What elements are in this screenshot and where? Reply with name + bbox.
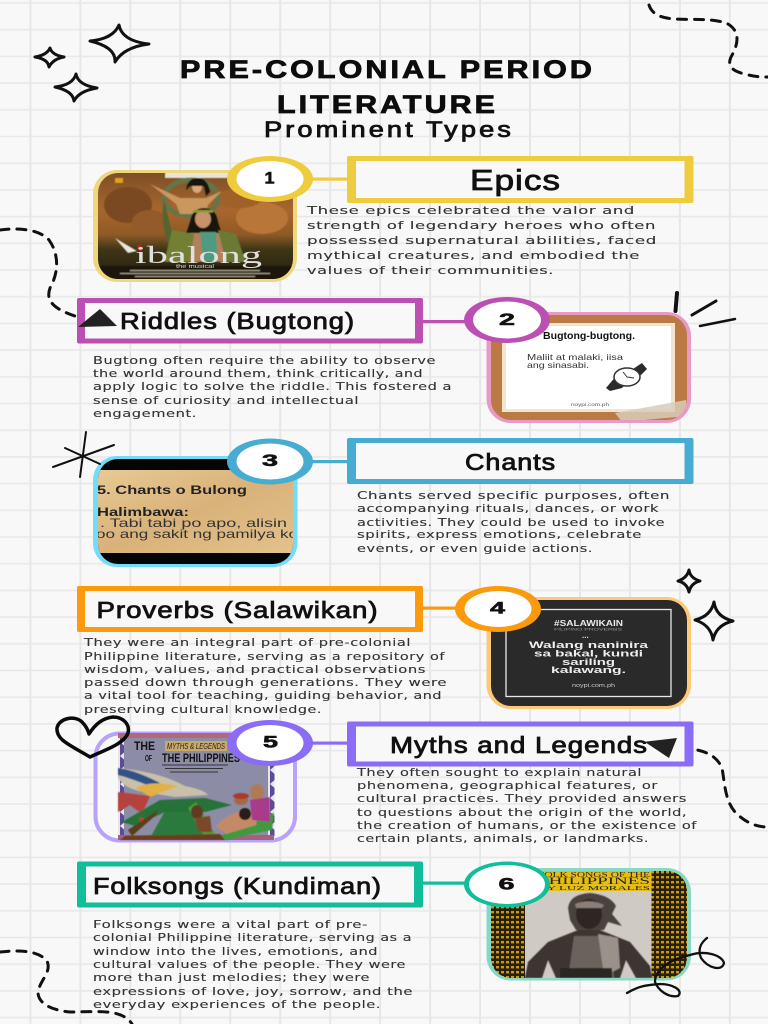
- title: PRE-COLONIAL PERIOD: [180, 56, 595, 84]
- connector 6: [422, 882, 466, 885]
- icon: heart outline: [57, 717, 128, 757]
- number badge 1: [227, 156, 313, 202]
- text: myths description: the creation of humans, or the existence of: [357, 820, 697, 832]
- icon: triangle pointer: [645, 738, 677, 758]
- icon: medium sparkle: [55, 74, 97, 101]
- text: myths description: [356, 767, 697, 845]
- text: epics description: mythical creatures, and embodied the: [307, 250, 640, 262]
- icon: large sparkle right: [695, 602, 733, 640]
- image: chants paper: oo ang sakit ng pamilya ko: [96, 527, 298, 541]
- text: chants description: events, or even guide actions.: [357, 543, 593, 555]
- text: myths description: certain plants, animals, or landmarks.: [357, 833, 649, 845]
- image: myths and legends poster: MYTHS & LEGENDS: [167, 742, 226, 751]
- dashed curve: top right: [649, 5, 768, 77]
- heading box: epics: [347, 156, 694, 203]
- image: ibalong poster: the musical: [176, 264, 214, 270]
- text: folksongs description: everyday experiences of the people.: [93, 999, 381, 1011]
- image: salawikain card: Walang naninira: [529, 640, 649, 651]
- image: bugtong card: noypi.com.ph: [571, 402, 610, 407]
- text: epics description: values of their communities.: [307, 265, 554, 277]
- title: LITERATURE: [277, 91, 498, 119]
- image: salawikain card: kalawang.: [551, 665, 626, 676]
- image: bugtong card: Bugtong-bugtong.: [543, 330, 635, 342]
- image: salawikain card: noypi.com.ph: [572, 683, 615, 689]
- number badge 6: 6: [498, 874, 514, 894]
- text: proverbs description: Philippine literature, serving as a repository of: [84, 651, 445, 663]
- image: myths and legends poster: THE: [134, 739, 155, 753]
- number badge 3: [227, 438, 313, 484]
- text: folksongs description: more than just melodies; they were: [93, 972, 370, 984]
- heading box: chants: Chants: [465, 449, 556, 475]
- image: folk songs album: FOLK SONGS OF THE: [538, 871, 650, 879]
- text: myths description: phenomena, geographical features, or: [357, 780, 658, 792]
- heading box: myths: [347, 722, 694, 766]
- text: chants description: accompanying rituals, dances, or work: [357, 503, 660, 515]
- heading box: epics: Epics: [470, 165, 561, 197]
- image: chants paper: 5. Chants o Bulong: [97, 483, 247, 497]
- heading box: chants: [347, 438, 694, 484]
- text: riddles description: the world around them, think critically, and: [93, 368, 423, 380]
- image: bugtong card: Maliit at malaki, iisa: [527, 352, 623, 362]
- image: chants paper: Halimbawa:: [97, 505, 189, 519]
- icon: triangle pointer: [78, 309, 117, 327]
- heading box: riddles: Riddles (Bugtong): [120, 308, 355, 334]
- panel: epics: [93, 156, 694, 282]
- text: riddles description: apply logic to solve the riddle. This fostered a: [93, 381, 452, 393]
- text: riddles description: [93, 355, 452, 420]
- heading box: riddles: [77, 298, 423, 344]
- number badge 6: [464, 862, 550, 908]
- icon: burst strokes: [676, 293, 735, 326]
- text: folksongs description: [93, 919, 413, 1011]
- number badge 3: 3: [262, 451, 278, 470]
- connector 5: [312, 742, 348, 745]
- number badge 2: 2: [499, 310, 515, 329]
- image: myths and legends poster: OF: [145, 754, 152, 763]
- panel: proverbs: [77, 570, 733, 716]
- text: proverbs description: preserving cultural knowledge.: [84, 704, 322, 716]
- connector 4: [422, 606, 458, 610]
- number badge 5: 5: [263, 732, 278, 752]
- image: folk songs album: [486, 868, 691, 980]
- text: chants description: activities. They could be used to invoke: [357, 517, 665, 529]
- image: salawikain card: ...: [582, 631, 589, 640]
- text: epics description: possessed supernatural abilities, faced: [307, 235, 657, 247]
- text: proverbs description: wisdom, values, and practical observations: [84, 664, 426, 676]
- panel: folksongs: [77, 862, 724, 1011]
- text: riddles description: engagement.: [93, 408, 197, 420]
- text: chants description: Chants served specific purposes, often: [357, 490, 670, 502]
- image: salawikain card: #SALAWIKAIN: [554, 619, 623, 628]
- heading box: folksongs: Folksongs (Kundiman): [93, 873, 382, 899]
- connector 2: [422, 320, 466, 323]
- text: epics description: These epics celebrated the valor and: [305, 205, 635, 217]
- image: salawikain card: sa bakal, kundi: [534, 648, 643, 660]
- text: myths description: cultural practices. They provided answers: [357, 793, 687, 805]
- image: salawikain card: FILIPINO PROVERBS: [554, 626, 623, 632]
- text: riddles description: sense of curiosity and intellectual: [93, 395, 359, 407]
- title: [180, 56, 595, 119]
- icon: large sparkle: [90, 25, 149, 62]
- subtitle: Prominent Types: [264, 117, 514, 142]
- dashed curve: left: [0, 229, 81, 318]
- text: proverbs description: passed down through generations. They were: [84, 677, 447, 689]
- image: salawikain card: sariling: [562, 657, 615, 668]
- image: chants paper: . Tabi tabi po apo, alisin: [100, 516, 287, 530]
- text: proverbs description: [83, 637, 447, 716]
- icon: scribble loop: [627, 938, 724, 996]
- text: chants description: [357, 490, 670, 555]
- icon: small sparkle: [35, 48, 64, 67]
- number badge 4: [455, 586, 541, 632]
- image: myths and legends poster: THE PHILIPPINES: [162, 751, 240, 765]
- text: folksongs description: colonial Philippine literature, serving as a: [93, 932, 412, 944]
- icon: wristwatch: [606, 363, 647, 391]
- number badge 4: 4: [490, 598, 506, 618]
- text: epics description: [305, 205, 657, 277]
- image: ibalong poster: [93, 170, 297, 282]
- image: bugtong card: [486, 312, 691, 423]
- text: folksongs description: window into the lives, emotions, and: [93, 946, 378, 958]
- connector 3: [312, 460, 348, 463]
- image: bugtong card: ang sinasabi.: [527, 360, 589, 370]
- heading box: proverbs: Proverbs (Salawikan): [96, 597, 378, 623]
- number badge 5: [227, 720, 313, 766]
- dashed curve: right: [681, 748, 768, 827]
- image: ibalong poster: ibalong: [135, 243, 262, 269]
- panel: riddles: [77, 293, 735, 423]
- panel: myths and legends: [57, 717, 697, 845]
- image: salawikain card: [486, 597, 691, 709]
- text: myths description: They often sought to explain natural: [356, 767, 642, 779]
- heading box: folksongs: [77, 862, 423, 908]
- icon: asterisk star: [53, 432, 114, 477]
- number badge 1: 1: [264, 168, 274, 188]
- icon: small sparkle right: [678, 570, 700, 592]
- text: epics description: strength of legendary heroes who often: [307, 220, 656, 232]
- heading box: myths: Myths and Legends: [390, 732, 648, 758]
- text: proverbs description: a vital tool for teaching, guiding behavior, and: [84, 690, 442, 702]
- dashed curve: bottom left: [0, 951, 132, 1024]
- image: myths and legends poster: [96, 733, 295, 840]
- connector 1: [312, 178, 348, 181]
- image: folk songs album: BY LUZ MORALES: [538, 885, 651, 892]
- text: folksongs description: Folksongs were a vital part of pre-: [93, 919, 368, 931]
- text: folksongs description: expressions of love, joy, sorrow, and the: [93, 986, 413, 998]
- number badge 2: [464, 297, 550, 343]
- text: riddles description: Bugtong often require the ability to observe: [93, 355, 436, 367]
- image: chants paper: [93, 456, 298, 567]
- text: proverbs description: They were an integral part of pre-colonial: [83, 637, 411, 649]
- text: folksongs description: cultural values of the people. They were: [93, 959, 406, 971]
- text: myths description: to questions about the origin of the world,: [357, 807, 687, 819]
- image: folk songs album: PHILIPPINES: [538, 876, 650, 886]
- text: chants description: spirits, express emotions, celebrate: [357, 529, 642, 541]
- panel: chants: [53, 432, 694, 567]
- heading box: proverbs: [77, 586, 423, 632]
